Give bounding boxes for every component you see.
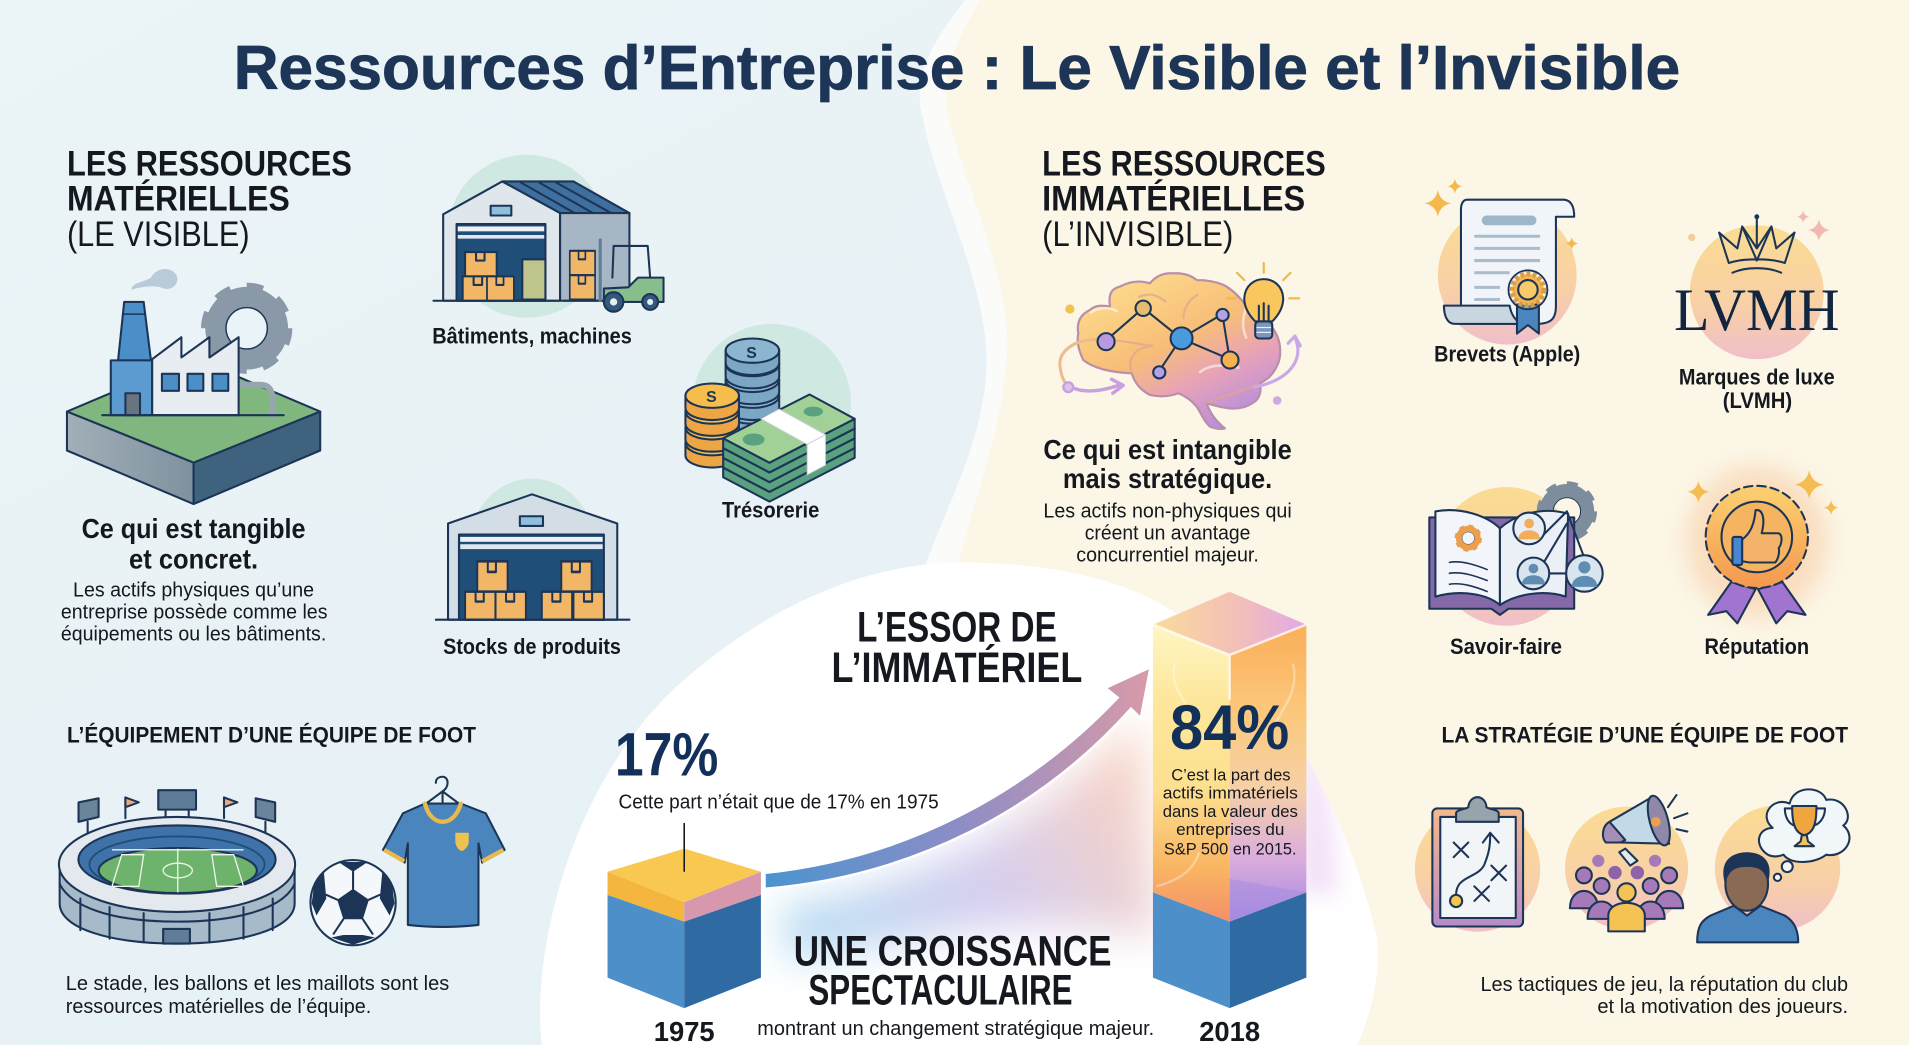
text: strategy caption: Les tactiques de jeu, la réputation du club bbox=[1480, 973, 1848, 996]
label: cash: Trésorerie bbox=[722, 497, 819, 522]
label: know-how: Savoir-faire bbox=[1450, 634, 1562, 659]
text: equipment caption: Le stade, les ballons et les maillots sont les bbox=[66, 972, 449, 995]
background: invisible side bbox=[945, 0, 1909, 1045]
icon: coins and cash bbox=[685, 324, 855, 502]
heading: spectacular growth: UNE CROISSANCE bbox=[794, 927, 1112, 975]
label: reputation: Réputation bbox=[1704, 634, 1809, 659]
heading: rise of intangibles: L’ESSOR DE bbox=[857, 604, 1057, 652]
icon: luxury crown bbox=[1688, 211, 1830, 359]
icon: motivated player bbox=[1697, 789, 1849, 942]
text: tangible definition bbox=[61, 513, 328, 645]
heading: material resources: LES RESSOURCES bbox=[67, 144, 352, 183]
panel: rise of intangibles bbox=[608, 592, 1337, 1045]
text: tangible definition: Ce qui est tangible bbox=[82, 513, 306, 544]
label: luxury brands: Marques de luxe bbox=[1679, 365, 1835, 390]
text: 84 percent caption: S&P 500 en 2015. bbox=[1164, 840, 1297, 859]
panel: football strategy bbox=[1415, 723, 1849, 1018]
heading: spectacular growth: SPECTACULAIRE bbox=[808, 966, 1073, 1014]
text: intangible definition: Les actifs non-physiques qui bbox=[1043, 500, 1292, 522]
icon: factory on platform bbox=[67, 269, 320, 504]
icon: brain with network and bulb bbox=[1060, 263, 1300, 429]
icon: jersey bbox=[383, 777, 505, 927]
panel: material resources bbox=[61, 144, 855, 659]
text: intangible definition bbox=[1043, 434, 1292, 566]
text: 84 percent caption bbox=[1163, 765, 1298, 859]
label: stocks: Stocks de produits bbox=[443, 634, 621, 659]
icon: tactics clipboard bbox=[1415, 797, 1540, 932]
text: 17 percent caption: Cette part n’était que de 17% en 1975 bbox=[618, 790, 939, 813]
label: buildings: Bâtiments, machines bbox=[432, 323, 632, 348]
title: Ressources d’Entreprise : Le Visible et l’Invisible bbox=[234, 34, 1680, 103]
heading: football equipment: L’ÉQUIPEMENT D’UNE ÉQUIPE DE FOOT bbox=[67, 723, 476, 748]
chart glow bbox=[779, 718, 1157, 962]
icon: coins and cash: S bbox=[746, 345, 757, 362]
heading: intangible resources: LES RESSOURCES bbox=[1042, 144, 1326, 183]
icon: reputation medal bbox=[1686, 466, 1838, 623]
background: white divider band bbox=[920, 0, 1909, 1045]
text: equipment caption: ressources matérielles de l’équipe. bbox=[66, 995, 371, 1018]
text: strategy caption: et la motivation des joueurs. bbox=[1597, 995, 1848, 1018]
panel: intangible resources bbox=[1042, 144, 1840, 659]
text: tangible definition: entreprise possède comme les bbox=[61, 601, 328, 623]
text: equipment caption bbox=[66, 972, 449, 1018]
text: 84 percent caption: C’est la part des bbox=[1171, 765, 1291, 784]
text: 84 percent caption: actifs immatériels bbox=[1163, 784, 1298, 803]
stat: 17 percent: 17% bbox=[615, 721, 718, 789]
heading: material resources bbox=[67, 144, 352, 254]
label: patents: Brevets (Apple) bbox=[1434, 342, 1580, 367]
text: intangible definition: concurrentiel majeur. bbox=[1076, 544, 1259, 566]
heading: material resources: (LE VISIBLE) bbox=[67, 215, 250, 254]
icon: know-how book bbox=[1429, 486, 1603, 626]
heading: intangible resources bbox=[1042, 144, 1326, 254]
heading: material resources: MATÉRIELLES bbox=[67, 179, 290, 219]
stat: 84 percent: 84% bbox=[1170, 693, 1289, 763]
heading: rise of intangibles: L’IMMATÉRIEL bbox=[832, 644, 1082, 692]
heading: spectacular growth bbox=[794, 927, 1112, 1014]
heading: rise of intangibles bbox=[832, 604, 1082, 692]
text: tangible definition: et concret. bbox=[129, 544, 258, 575]
panel: football equipment bbox=[59, 723, 505, 1018]
icon: football bbox=[310, 860, 396, 945]
icon: coins and cash: S bbox=[706, 389, 717, 406]
background: central spotlight bbox=[540, 562, 1378, 1045]
heading: football strategy: LA STRATÉGIE D’UNE ÉQUIPE DE FOOT bbox=[1441, 723, 1848, 748]
arrow: growth bbox=[765, 667, 1151, 889]
text: intangible definition: mais stratégique. bbox=[1063, 463, 1272, 494]
label: luxury brands bbox=[1679, 365, 1835, 413]
text: strategy caption bbox=[1480, 973, 1848, 1018]
text: tangible definition: Les actifs physiques qu’une bbox=[73, 580, 314, 602]
icon: warehouse and forklift bbox=[433, 155, 664, 318]
heading: intangible resources: IMMATÉRIELLES bbox=[1042, 179, 1305, 219]
text: intangible definition: créent un avantage bbox=[1085, 522, 1250, 544]
heading: intangible resources: (L’INVISIBLE) bbox=[1042, 215, 1233, 254]
label: luxury brands: (LVMH) bbox=[1723, 388, 1792, 413]
text: tangible definition: équipements ou les bâtiments. bbox=[61, 623, 326, 645]
text: 84 percent caption: dans la valeur des bbox=[1163, 802, 1298, 821]
logo: LVMH: LVMH bbox=[1674, 277, 1840, 344]
bar: 1975 bbox=[608, 823, 761, 1008]
icon: megaphone and crowd bbox=[1565, 794, 1688, 931]
text: 84 percent caption: entreprises du bbox=[1176, 820, 1284, 839]
text: strategic shift: montrant un changement stratégique majeur. bbox=[757, 1017, 1154, 1040]
icon: stadium bbox=[59, 790, 295, 944]
text: intangible definition: Ce qui est intangible bbox=[1043, 434, 1292, 465]
icon: patent scroll bbox=[1424, 179, 1578, 345]
bar: 2018 bbox=[1153, 592, 1337, 1008]
icon: stock warehouse bbox=[436, 478, 629, 620]
